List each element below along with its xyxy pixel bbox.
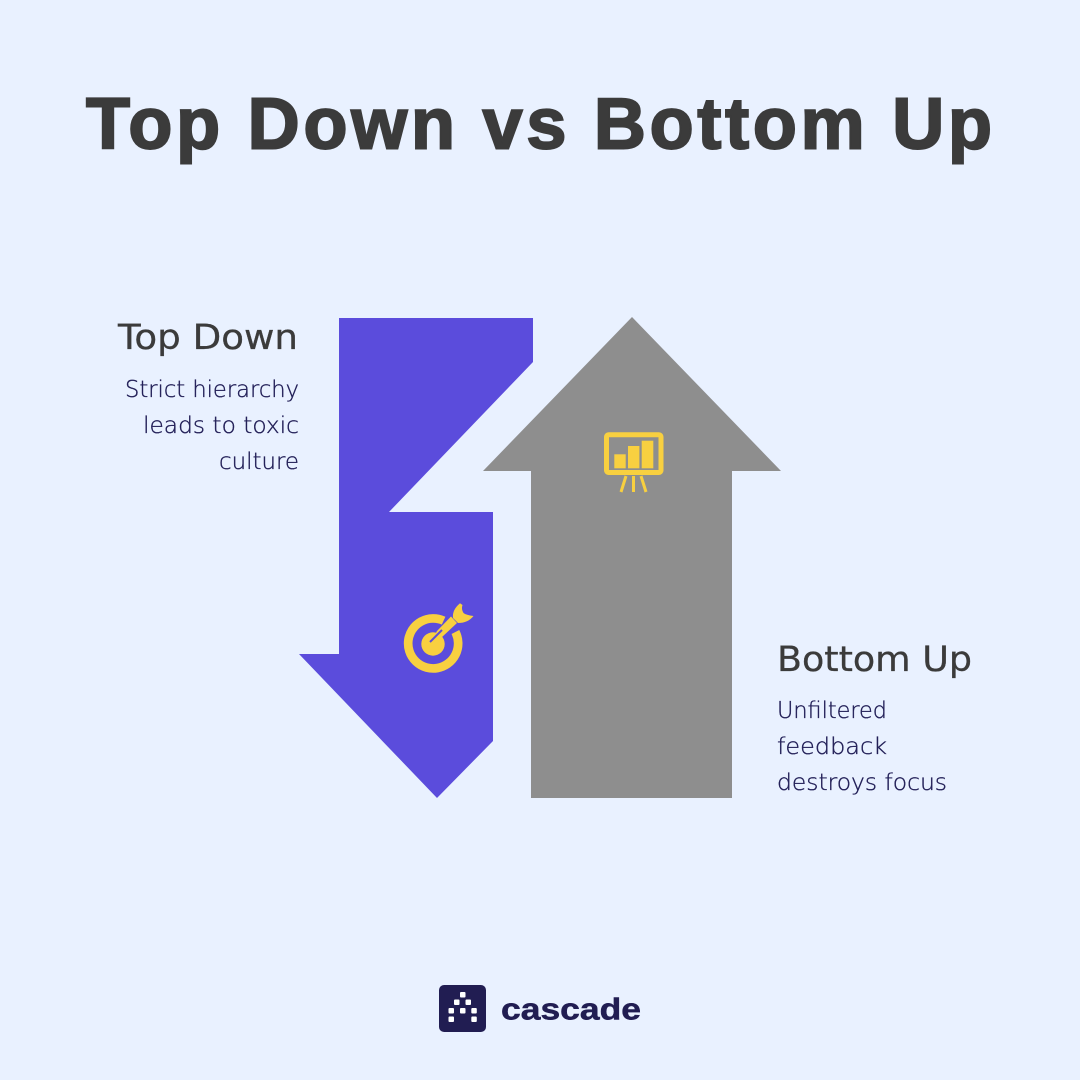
text: bottom up description: Unfiltered — [777, 698, 887, 724]
icon: target with dart — [408, 603, 474, 668]
text: bottom up description: destroys focus — [777, 770, 947, 796]
text: bottom up description: feedback — [777, 734, 887, 760]
text: top down description: culture — [219, 449, 299, 475]
text: top down description: leads to toxic — [143, 413, 299, 439]
text: bottom up description — [777, 698, 947, 796]
logo mark — [439, 985, 486, 1032]
title: Top Down vs Bottom Up — [86, 84, 992, 164]
arrow: top down — [299, 318, 533, 798]
text: top down description — [125, 377, 299, 475]
logo wordmark: cascade — [501, 992, 641, 1026]
icon: presentation board with bar chart — [606, 435, 661, 492]
logo: cascade — [439, 985, 641, 1032]
text: top down description: Strict hierarchy — [125, 377, 299, 403]
heading: top down: Top Down — [117, 318, 298, 358]
arrow: bottom up — [483, 317, 781, 798]
heading: bottom up: Bottom Up — [777, 640, 972, 680]
